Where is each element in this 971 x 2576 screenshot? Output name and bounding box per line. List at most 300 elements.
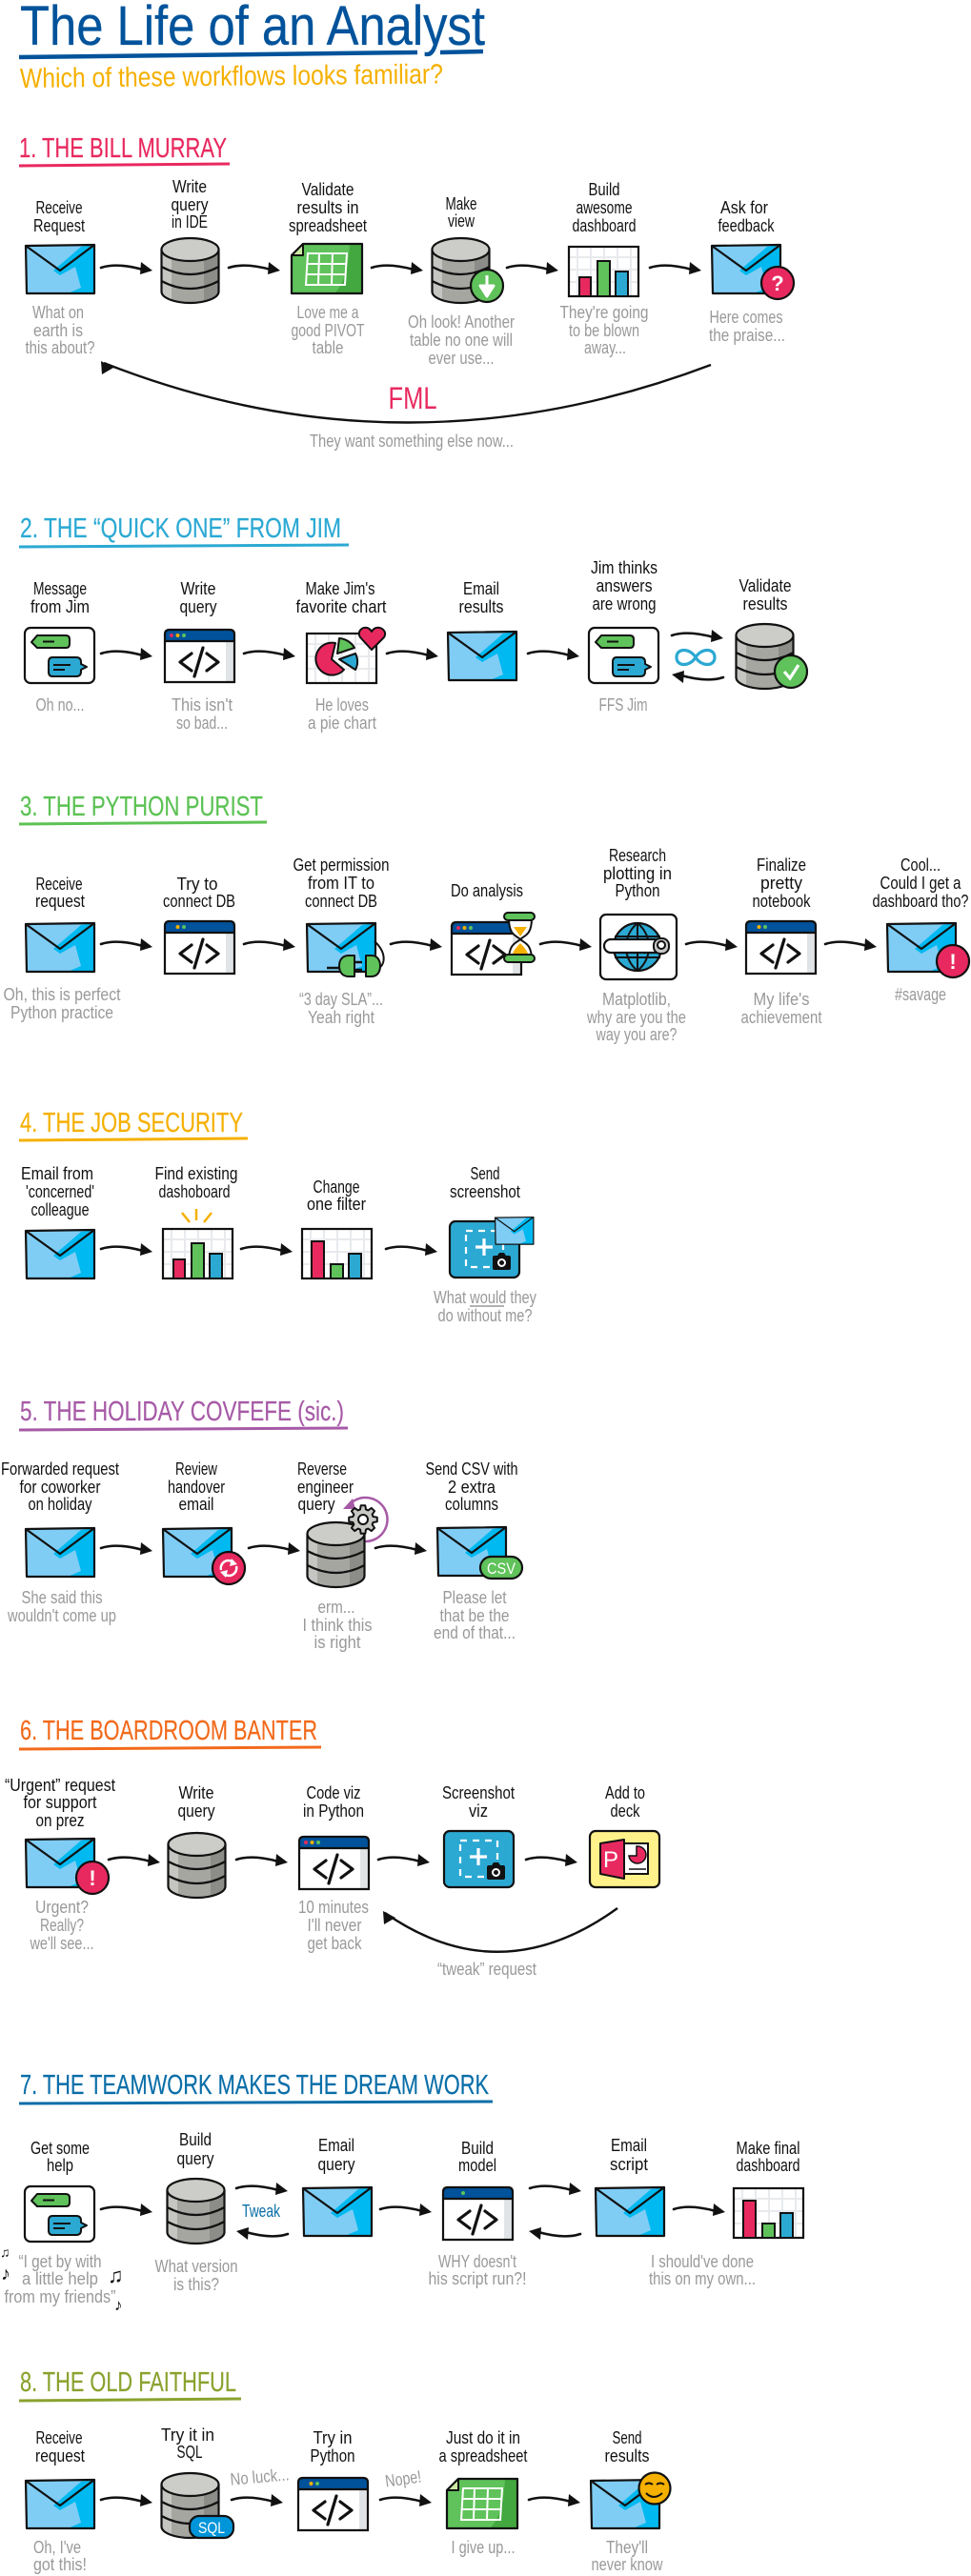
panel: 6. the boardroom banter — [5, 1716, 659, 1979]
label: handover — [168, 1478, 225, 1497]
note: table — [313, 338, 343, 357]
label: Finalize — [757, 855, 806, 875]
icon: email — [448, 632, 516, 680]
note: from my friends” — [4, 2287, 116, 2306]
arrow — [101, 648, 152, 660]
label: Make Jim's — [305, 579, 375, 598]
arrow — [101, 1243, 152, 1256]
icon: email with question badge — [712, 245, 794, 299]
label — [30, 2139, 90, 2175]
label: Python — [616, 881, 659, 900]
note: Oh, I've — [33, 2538, 81, 2557]
arrows: tweak loop — [236, 2183, 288, 2240]
icon: email — [26, 923, 94, 972]
label — [297, 1459, 354, 1514]
label — [30, 579, 90, 616]
label — [295, 579, 387, 616]
panel: 7. the teamwork makes the dream work — [0, 2070, 803, 2314]
label: Build — [179, 2130, 212, 2149]
note — [7, 1588, 116, 1625]
arrow — [372, 262, 423, 274]
note: get back — [307, 1934, 362, 1953]
label: help — [47, 2156, 73, 2175]
icon: database — [162, 238, 219, 303]
note: wouldn't come up — [7, 1606, 116, 1625]
note: “3 day SLA”... — [299, 990, 383, 1009]
icon: email — [26, 1528, 94, 1577]
panel: 4. the job security — [19, 1108, 536, 1325]
icon: email with exclamation badge — [887, 923, 969, 977]
label — [21, 1164, 94, 1219]
icon: email with plug — [307, 923, 384, 976]
note: WHY doesn't — [438, 2252, 516, 2271]
label — [459, 579, 503, 616]
label: Do analysis — [451, 881, 523, 900]
note: no luck: No luck... — [230, 2465, 290, 2489]
note: FFS Jim — [598, 695, 648, 714]
arrow — [109, 1854, 160, 1866]
label: in Python — [303, 1801, 364, 1821]
note: Oh, this is perfect — [4, 985, 120, 1004]
label: Make final — [736, 2139, 800, 2158]
icon: music notes: ♫ — [0, 2244, 10, 2260]
note — [434, 1288, 536, 1325]
note: is this? — [173, 2275, 219, 2294]
label: “Urgent” request — [5, 1776, 115, 1795]
label: write query — [172, 177, 208, 231]
icon: email — [26, 2480, 94, 2528]
icon: code window — [165, 921, 234, 974]
arrow — [674, 2204, 725, 2216]
heading: section 7: 7. THE TEAMWORK MAKES THE DREAM WORK — [20, 2070, 489, 2101]
icon: database — [168, 1833, 225, 1898]
label — [603, 846, 672, 900]
icon: chat — [25, 2186, 94, 2242]
label: validate: results in — [297, 198, 358, 217]
label — [311, 2428, 354, 2465]
note — [560, 303, 648, 357]
label: Code viz — [307, 1783, 360, 1802]
label: connect DB — [305, 892, 377, 911]
note: tweak request: “tweak” request — [437, 1960, 536, 1979]
arrow — [540, 938, 592, 951]
icon: database with check badge — [736, 624, 807, 689]
arrow — [529, 2494, 580, 2506]
note: got this! — [33, 2555, 87, 2574]
callout: FML: FML — [389, 381, 436, 415]
label — [307, 1177, 366, 1214]
label: ask for feedback: Ask for — [720, 198, 768, 217]
icon: database with gear — [307, 1498, 388, 1587]
icon: database — [168, 2179, 225, 2244]
note: never know — [591, 2555, 663, 2574]
icon: email — [26, 1230, 94, 1278]
note: so bad... — [176, 714, 228, 733]
arrow — [101, 938, 152, 951]
note: we'll see... — [30, 1934, 93, 1953]
note: they want something else: They want something else now... — [310, 432, 514, 451]
note — [172, 695, 233, 733]
icon: email with smirking face — [591, 2473, 671, 2528]
note: away... — [584, 338, 626, 357]
icon: music notes: ♪ — [1, 2264, 10, 2284]
label: engineer — [297, 1478, 354, 1497]
label: write query: Write — [172, 177, 207, 196]
label: for coworker — [19, 1478, 101, 1497]
label: Get some — [30, 2139, 90, 2158]
label: Validate — [739, 576, 791, 595]
label — [438, 2428, 528, 2465]
label: Jim thinks — [591, 558, 657, 577]
arrow — [101, 2494, 152, 2506]
arrow — [236, 1854, 288, 1866]
note — [292, 303, 364, 357]
icon: code window — [165, 630, 234, 682]
note: this about? — [25, 338, 95, 357]
arrow — [244, 938, 295, 951]
label: query — [297, 1495, 335, 1514]
label: connect DB — [163, 892, 235, 911]
label: receive request: Request — [33, 216, 85, 235]
icon: email with exclamation badge — [26, 1839, 109, 1894]
note: I think this — [303, 1616, 372, 1635]
note: #savage — [895, 985, 946, 1004]
label: notebook — [753, 892, 811, 911]
note: ever use... — [429, 349, 494, 368]
panel: 5. the holiday covfefe — [1, 1397, 522, 1652]
label: write query: query — [172, 195, 208, 214]
icon: email with CSV badge — [437, 1527, 522, 1579]
arrow — [507, 262, 558, 274]
label: results — [459, 597, 503, 616]
label: Python — [311, 2446, 354, 2465]
arrow — [378, 1854, 430, 1866]
icon: spreadsheet — [447, 2479, 517, 2528]
label: dashboard — [736, 2156, 800, 2175]
note: They'll — [606, 2538, 648, 2557]
label: email — [179, 1495, 213, 1514]
arrow — [101, 2204, 152, 2216]
note: “I get by with — [19, 2252, 101, 2271]
heading: section 6: 6. THE BOARDROOM BANTER — [20, 1716, 317, 1746]
label — [425, 1459, 518, 1514]
note: They're going — [560, 303, 648, 322]
icon: slide deck — [590, 1831, 659, 1887]
note: I give up... — [452, 2538, 515, 2557]
icon: email with question badge: ? — [771, 272, 784, 295]
note — [30, 1898, 93, 1953]
label — [739, 576, 791, 614]
icon: spreadsheet — [292, 244, 362, 293]
label: make view: Make — [446, 194, 476, 213]
label: colleague — [30, 1200, 90, 1219]
note: is right — [314, 1633, 360, 1652]
label: build dashboard: dashboard — [572, 216, 637, 235]
note — [4, 2252, 116, 2306]
label — [163, 875, 235, 911]
arrow: tweak loop back — [383, 1908, 617, 1952]
note: Matplotlib, — [602, 990, 671, 1009]
label: make view — [446, 194, 476, 231]
note: Please let — [442, 1588, 507, 1607]
arrows: back and forth — [529, 2183, 581, 2240]
note — [591, 2538, 663, 2574]
note — [741, 990, 821, 1027]
label: Find existing — [154, 1164, 238, 1183]
label: are wrong — [593, 594, 656, 614]
panel: 2. the quick one from Jim — [19, 513, 807, 733]
label: build dashboard: awesome — [576, 198, 633, 217]
label: Receive — [36, 875, 82, 894]
label: dashoboard — [158, 1182, 231, 1201]
label: viz — [469, 1801, 488, 1821]
note — [308, 695, 376, 733]
note: Here comes — [709, 308, 783, 327]
label: model — [458, 2156, 496, 2175]
label: on holiday — [29, 1495, 91, 1514]
note: his script run?! — [429, 2269, 526, 2288]
label — [161, 2425, 214, 2462]
label: results — [743, 594, 787, 614]
note — [25, 303, 95, 357]
icon: email — [303, 2187, 372, 2236]
icon: slide deck: P — [603, 1847, 618, 1873]
arrow — [101, 262, 152, 274]
note: a pie chart — [308, 714, 376, 733]
arrow — [391, 938, 442, 951]
note: My life's — [753, 990, 810, 1009]
note: why are you the — [586, 1008, 686, 1027]
label — [610, 2136, 648, 2174]
label: Try to — [177, 875, 217, 894]
panel: 3. the python purist — [4, 792, 969, 1044]
label — [591, 558, 657, 614]
label — [154, 1164, 238, 1201]
label — [873, 855, 968, 911]
icon: bar chart — [569, 247, 638, 296]
note: Love me a — [297, 303, 359, 322]
label: Reverse — [297, 1459, 347, 1479]
label: Write — [179, 1783, 213, 1802]
label: Email — [318, 2136, 354, 2155]
label: results — [604, 2446, 650, 2465]
label: Forwarded request — [1, 1459, 119, 1479]
note: way you are? — [596, 1025, 677, 1044]
arrow — [686, 938, 738, 951]
arrow — [387, 648, 438, 660]
note — [586, 990, 686, 1044]
label: build dashboard — [572, 180, 637, 235]
heading: section 2: 2. THE “QUICK ONE” FROM JIM — [20, 513, 341, 544]
label — [168, 1459, 225, 1514]
label — [303, 1783, 364, 1821]
label: request — [35, 2446, 85, 2465]
label: Send — [471, 1164, 499, 1183]
arrow — [249, 1542, 300, 1555]
label — [458, 2139, 496, 2175]
icon: code window — [298, 2478, 368, 2530]
label: Review — [175, 1459, 218, 1479]
label — [604, 2428, 650, 2465]
label: Receive — [36, 2428, 82, 2447]
note: What on — [32, 303, 84, 322]
label: Get permission — [293, 855, 389, 875]
arrow — [232, 2494, 283, 2506]
label — [177, 2130, 213, 2168]
arrow — [244, 648, 295, 660]
label: on prez — [36, 1811, 84, 1830]
label — [442, 1783, 515, 1821]
icon: music notes: ♫ — [108, 2264, 124, 2287]
label — [318, 2136, 354, 2174]
arrow — [241, 1243, 293, 1256]
note: Python practice — [10, 1003, 113, 1022]
note: I should've done — [651, 2252, 754, 2271]
icon: screenshot — [444, 1831, 514, 1887]
label — [5, 1776, 115, 1830]
label: Email — [611, 2136, 647, 2155]
note: nope: Nope! — [384, 2467, 422, 2491]
note — [429, 2252, 526, 2288]
arrow — [101, 1542, 152, 1555]
icon: chat — [25, 628, 94, 683]
arrow — [375, 1542, 427, 1555]
note — [299, 990, 383, 1027]
note — [709, 308, 785, 345]
icon: code window with hourglass — [452, 913, 535, 975]
heading: section 1: 1. THE BILL MURRAY — [19, 133, 227, 164]
icon: music notes — [0, 2244, 124, 2314]
icon: bar chart — [302, 1229, 372, 1278]
note — [298, 1898, 369, 1953]
note: to be blown — [569, 321, 639, 340]
note — [154, 2257, 238, 2294]
label: receive request — [33, 198, 85, 235]
note: Oh look! Another — [408, 312, 515, 332]
label — [736, 2139, 800, 2175]
subtitle: Which of these workflows looks familiar? — [20, 59, 443, 94]
icon: email with exclamation badge: ! — [89, 1866, 96, 1890]
callout: tweak: Tweak — [242, 2202, 281, 2221]
label: make view: view — [448, 211, 475, 231]
label: Just do it in — [446, 2428, 520, 2447]
label: answers — [597, 576, 652, 595]
icon: code window — [443, 2187, 513, 2240]
label: one filter — [307, 1195, 366, 1214]
note: Oh no... — [36, 695, 84, 714]
arrow — [380, 2204, 432, 2216]
icon: email with CSV badge: CSV — [487, 1560, 516, 1578]
icon: code window — [299, 1837, 369, 1889]
label: Message — [33, 579, 87, 598]
label: Research — [609, 846, 666, 865]
icon: music notes: ♪ — [114, 2296, 122, 2314]
panel: 8. the old faithful — [19, 2367, 671, 2574]
note — [649, 2252, 756, 2288]
label: Send — [612, 2428, 642, 2447]
icon: screenshot with email — [450, 1218, 534, 1278]
note: What version — [154, 2257, 238, 2276]
heading: section 3: 3. THE PYTHON PURIST — [20, 792, 263, 822]
icon: bar chart with sparkle — [163, 1209, 233, 1278]
label: Send CSV with — [425, 1459, 518, 1479]
label: validate: spreadsheet — [289, 216, 367, 235]
label: deck — [610, 1801, 640, 1821]
icon: email — [596, 2187, 664, 2236]
note: I'll never — [307, 1916, 362, 1935]
note: a little help — [22, 2269, 98, 2288]
label — [35, 875, 85, 911]
note: 10 minutes — [298, 1898, 369, 1917]
arrows: infinite loop — [672, 630, 723, 683]
note: this on my own... — [649, 2269, 756, 2288]
label: validate — [289, 180, 367, 235]
label: from Jim — [30, 597, 90, 616]
note: Yeah right — [308, 1008, 374, 1027]
label: columns — [445, 1495, 498, 1514]
note: Really? — [40, 1916, 84, 1935]
note: the praise... — [709, 326, 785, 345]
heading: section 4: 4. THE JOB SECURITY — [20, 1108, 243, 1138]
icon: database with SQL badge: SQL — [198, 2519, 225, 2537]
icon: email with refresh badge — [163, 1528, 245, 1584]
icon: code window — [746, 921, 816, 974]
label: Email from — [21, 1164, 93, 1183]
note: He loves — [315, 695, 369, 714]
label: Screenshot — [442, 1783, 515, 1802]
label — [605, 1783, 645, 1821]
arrow — [526, 1854, 577, 1866]
note: achievement — [741, 1008, 821, 1027]
label — [177, 1783, 215, 1821]
arrow: FML loop back — [101, 361, 711, 423]
label: query — [177, 1801, 215, 1821]
label: from IT to — [308, 874, 374, 893]
label: Change — [313, 1177, 360, 1197]
label — [450, 1164, 520, 1201]
note: end of that... — [434, 1623, 516, 1642]
label: Add to — [605, 1783, 645, 1802]
label — [35, 2428, 85, 2465]
label: validate: Validate — [301, 180, 354, 199]
label: Write — [181, 579, 215, 598]
label: pretty — [760, 874, 802, 893]
label: Try in — [313, 2428, 353, 2447]
label — [293, 855, 389, 911]
label: a spreadsheet — [438, 2446, 528, 2465]
note: table no one will — [410, 331, 513, 350]
icon: bar chart — [734, 2188, 803, 2238]
label: 'concerned' — [26, 1182, 94, 1201]
label: build dashboard: Build — [589, 180, 619, 199]
icon: chat — [589, 628, 658, 683]
icon: database with download badge — [433, 238, 503, 303]
heading: section 5: 5. THE HOLIDAY COVFEFE (sic.) — [20, 1397, 344, 1427]
arrow — [386, 1243, 437, 1256]
label: screenshot — [450, 1182, 520, 1201]
note: that be the — [440, 1606, 509, 1625]
label: ask for feedback: feedback — [718, 216, 775, 235]
label: query — [318, 2155, 354, 2174]
note: earth is — [33, 321, 83, 340]
arrow — [825, 938, 877, 951]
note: What would they — [434, 1288, 536, 1307]
heading: section 8: 8. THE OLD FAITHFUL — [20, 2367, 236, 2398]
label: Try it in — [161, 2425, 214, 2445]
label: Cool... — [900, 855, 941, 875]
note — [303, 1598, 372, 1652]
arrow — [229, 262, 280, 274]
